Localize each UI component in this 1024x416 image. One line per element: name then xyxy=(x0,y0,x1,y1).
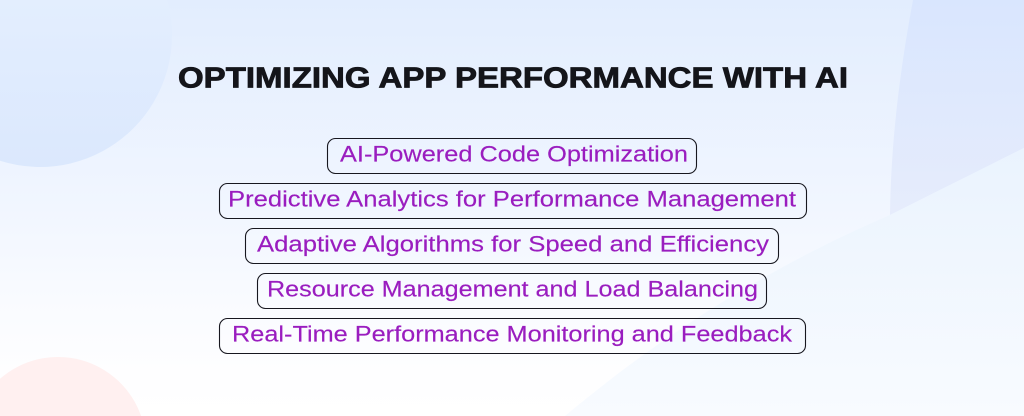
decorative shape: top right xyxy=(890,0,1024,215)
item: Resource Management and Load Balancing: Resource Management and Load Balancing xyxy=(267,277,758,302)
decorative circle: top left xyxy=(0,0,172,167)
item: Predictive Analytics for Performance Management: Predictive Analytics for Performance Management xyxy=(228,187,797,212)
item: Real-Time Performance Monitoring and Feedback: Real-Time Performance Monitoring and Feedback xyxy=(232,322,793,347)
title: OPTIMIZING APP PERFORMANCE WITH AI xyxy=(178,62,848,94)
item: Adaptive Algorithms for Speed and Efficiency xyxy=(246,228,778,264)
item: AI-Powered Code Optimization: AI-Powered Code Optimization xyxy=(340,142,688,167)
item: Predictive Analytics for Performance Management xyxy=(220,184,806,218)
decorative circle: bottom left xyxy=(0,357,141,416)
decorative shape: bottom right xyxy=(565,148,1024,416)
item: Adaptive Algorithms for Speed and Efficiency: Adaptive Algorithms for Speed and Efficiency xyxy=(257,232,770,257)
item: AI-Powered Code Optimization xyxy=(328,138,696,174)
list of techniques xyxy=(220,138,806,354)
item: Resource Management and Load Balancing xyxy=(258,274,766,308)
item: Real-Time Performance Monitoring and Feedback xyxy=(220,318,806,354)
